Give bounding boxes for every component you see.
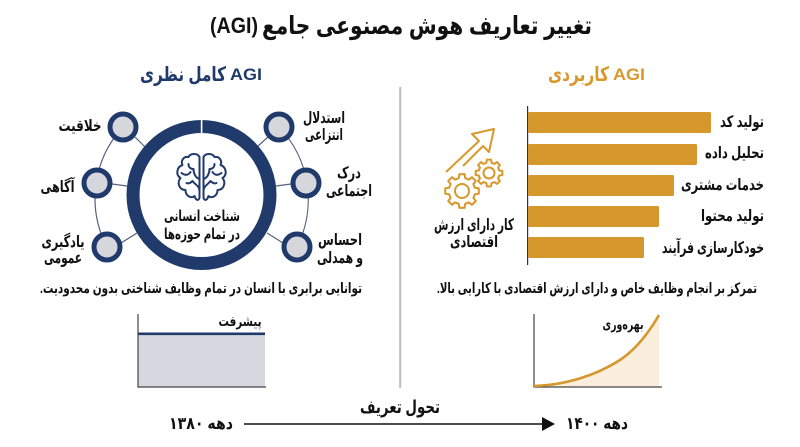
node labels: اجتماعی	[326, 183, 372, 200]
title: تغییر تعاریف هوش مصنوعی جامع	[262, 12, 592, 41]
node labels: انتزاعی	[305, 127, 343, 144]
center label: شناخت انسانی	[164, 208, 240, 225]
bar chart: applications: تولید محتوا	[701, 208, 764, 225]
node labels: و همدلی	[317, 250, 363, 267]
heading: applied AGI: AGI	[613, 65, 645, 84]
panel: theoretical AGI	[40, 64, 372, 387]
label: economically valuable work: کار دارای ارزش	[434, 217, 514, 234]
label: economically valuable work: اقتصادی	[450, 234, 498, 251]
diagram: human cognition ring	[40, 110, 372, 267]
bar chart: applications: تحلیل داده	[705, 145, 764, 162]
timeline: دهه ۱۴۰۰	[566, 414, 628, 433]
heading: theoretical AGI: کامل نظری	[140, 64, 226, 86]
nodes	[84, 114, 319, 260]
center label	[164, 208, 240, 243]
caption: theoretical AGI: توانایی برابری با انسان در تمام وظایف شناختی بدون محدودیت.	[40, 281, 362, 297]
node labels: استدلال	[303, 110, 345, 127]
bar chart: applications: تولید کد	[720, 114, 764, 131]
node labels	[40, 110, 372, 267]
timeline: دهه ۱۳۸۰	[169, 414, 233, 433]
label: economically valuable work	[434, 217, 514, 251]
icon: brain	[177, 154, 226, 200]
icon: arrow and gears	[445, 129, 502, 208]
chart: progress	[138, 313, 266, 387]
center label: در تمام حوزه‌ها	[164, 226, 240, 243]
heading: theoretical AGI: AGI	[230, 65, 262, 84]
node labels: یادگیری	[42, 232, 84, 251]
node labels: خلاقیت	[58, 118, 102, 135]
heading: applied AGI: کاربردی	[548, 64, 609, 86]
timeline	[169, 397, 628, 433]
panel: applied AGI	[434, 64, 764, 387]
bar chart: applications	[527, 106, 764, 265]
node labels: آگاهی	[40, 176, 75, 196]
chart: progress: پیشرفت	[218, 313, 262, 330]
node labels: عمومی	[44, 250, 82, 267]
node labels: درک	[337, 165, 361, 182]
chart: productivity	[534, 314, 662, 387]
bar chart: applications: خدمات مشتری	[681, 177, 764, 194]
title: (AGI)	[210, 13, 258, 38]
node labels: احساس	[318, 232, 362, 249]
arrow	[244, 417, 555, 431]
title	[210, 12, 592, 41]
chart: productivity: بهره‌وری	[602, 316, 644, 333]
timeline: تحول تعریف	[360, 397, 440, 418]
